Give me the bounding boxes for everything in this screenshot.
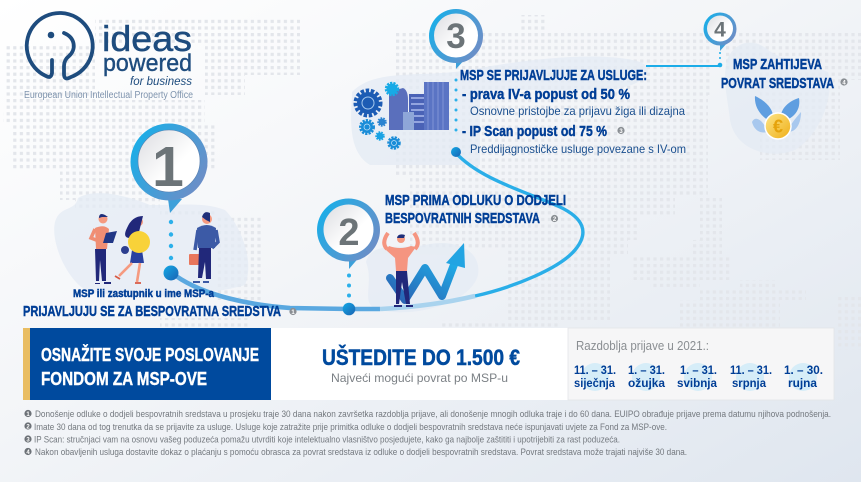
- step 3 text: Osnovne pristojbe za prijavu žiga ili dizajna: [470, 104, 685, 118]
- logo: ideas powered for business: [24, 13, 193, 101]
- panel: savings: Najveći mogući povrat po MSP-u: [331, 371, 508, 385]
- footnote 2: 2: [26, 424, 30, 430]
- panel: savings: UŠTEDITE DO 1.500 €: [322, 345, 520, 370]
- step 2: [317, 192, 566, 315]
- footnote 3: 3: [26, 438, 30, 444]
- footnotes: [24, 409, 831, 458]
- logo mark: [27, 13, 93, 78]
- footnote badge 1: 1: [291, 310, 295, 316]
- pin 3: 3: [446, 17, 466, 56]
- footnote 3: IP Scan: stručnjaci vam na osnovu vašeg poduzeća pomažu utvrditi koje intelektualno vlasništvo posjedujete, kako ga najbolje zaštititi i upotrijebiti za rast poduzeća.: [34, 434, 620, 446]
- step 3 text: MSP SE PRIJAVLJUJE ZA USLUGE:: [460, 67, 647, 84]
- period 1: siječnja: [574, 378, 616, 390]
- period 2: 1. – 31.: [628, 365, 665, 377]
- period 5: rujna: [788, 378, 818, 390]
- footnote badge 4: 4: [842, 80, 846, 86]
- period 4: [730, 365, 772, 390]
- dotted world map: [3, 15, 861, 326]
- step 3 text: [460, 67, 686, 156]
- panel: blue headline: [30, 328, 271, 400]
- footnote 1: 1: [26, 412, 30, 418]
- footnote badge 2: [551, 215, 558, 223]
- period 5: 1. – 30.: [784, 365, 823, 377]
- step 2 heading: [385, 192, 566, 227]
- step 3 text: - IP Scan popust od 75 %: [462, 123, 607, 140]
- pin 4: [704, 12, 736, 51]
- pin 3: [429, 9, 483, 69]
- icon: man with clipboard: [91, 214, 117, 284]
- pin 3 dotted connector: [451, 78, 461, 157]
- icon: man with briefcase: [189, 212, 218, 283]
- icon: growth arrow: [390, 243, 465, 300]
- footnote badge 4: [840, 78, 848, 86]
- step 3: [357, 9, 686, 157]
- period 5: [784, 365, 823, 390]
- pin 1 dotted connector: [164, 220, 178, 280]
- footnote badge 3: 3: [619, 129, 623, 135]
- step 3 text: - prava IV-a popust od 50 %: [462, 86, 630, 103]
- footnote 4: 4: [26, 450, 30, 456]
- panel: blue headline: FONDOM ZA MSP-OVE: [41, 368, 207, 389]
- icon: gears: [357, 84, 399, 148]
- period 2: ožujka: [628, 378, 666, 390]
- period 1: 11. – 31.: [574, 365, 616, 377]
- step 3 text: Preddijagnostičke usluge povezane s IV-om: [470, 142, 686, 156]
- panel: call-to-action band: [23, 328, 834, 400]
- pin 1: [130, 124, 208, 213]
- icon: cheering man: [384, 233, 418, 307]
- logo word: EUIPO: European Union Intellectual Property Office: [24, 90, 193, 101]
- icon: euro coin with leaves: €: [773, 116, 783, 136]
- pin 2: 2: [338, 212, 360, 254]
- step 1 text: [23, 288, 281, 320]
- footnote badge 1: [289, 308, 297, 316]
- pin 4 dotted connector: [718, 52, 722, 67]
- pin 2: [317, 198, 380, 269]
- step 4: [704, 12, 848, 139]
- footnote 2: Imate 30 dana od tog trenutka da se prijavite za usluge. Usluge koje zatražite prije primitka odluke o dodjeli bespovratnih sredstava neće ispunjavati uvjete za Fond za MSP-ove.: [34, 422, 667, 433]
- step 1 text: PRIJAVLJUJU SE ZA BESPOVRATNA SREDSTVA: [23, 303, 281, 320]
- period 1: [574, 365, 616, 390]
- footnote badge 3: [617, 127, 625, 135]
- pin 2 dotted connector: [343, 274, 355, 315]
- period 4: srpnja: [732, 378, 767, 390]
- step 4 heading: [721, 56, 834, 92]
- panel: application periods: [568, 328, 834, 400]
- footnote 4: Nakon obavljenih usluga dostavite dokaz o plaćanju s pomoću obrasca za povrat sredstava iz odluke o dodjeli bespovratnih sredstava. Povrat sredstava može trajati najviše 30 dana.: [35, 447, 687, 458]
- icon: euro coin with leaves: [752, 96, 801, 139]
- period 4: 11. – 31.: [730, 365, 772, 377]
- period 3: svibnja: [677, 378, 718, 390]
- step 2 heading: BESPOVRATNIH SREDSTAVA: [385, 210, 540, 227]
- panel: application periods: Razdoblja prijave u 2021.:: [576, 339, 709, 353]
- period 3: [677, 365, 718, 390]
- panel: blue headline: OSNAŽITE SVOJE POSLOVANJE: [41, 344, 259, 365]
- step 1 text: MSP ili zastupnik u ime MSP-a: [73, 288, 215, 300]
- period 2: [628, 365, 666, 390]
- step 1: [23, 124, 297, 320]
- period 3: 1. – 31.: [680, 365, 717, 377]
- footnote badge 2: 2: [553, 217, 557, 223]
- step 2 heading: MSP PRIMA ODLUKU O DODJELI: [385, 192, 566, 209]
- logo word: ideas: ideas: [102, 18, 192, 59]
- pin 1: 1: [152, 135, 184, 199]
- panel: savings: [271, 328, 568, 400]
- pin 4: 4: [714, 18, 726, 42]
- icon: buildings: [389, 82, 449, 130]
- step 4 heading: MSP ZAHTIJEVA: [733, 56, 822, 73]
- route curve: [176, 66, 720, 309]
- logo word: powered: powered: [103, 50, 192, 77]
- band: yellow accent: [23, 328, 31, 400]
- logo word: for business: for business: [130, 74, 192, 88]
- icon: woman with lightbulb: [115, 216, 150, 283]
- panel: background blobs: [54, 43, 830, 312]
